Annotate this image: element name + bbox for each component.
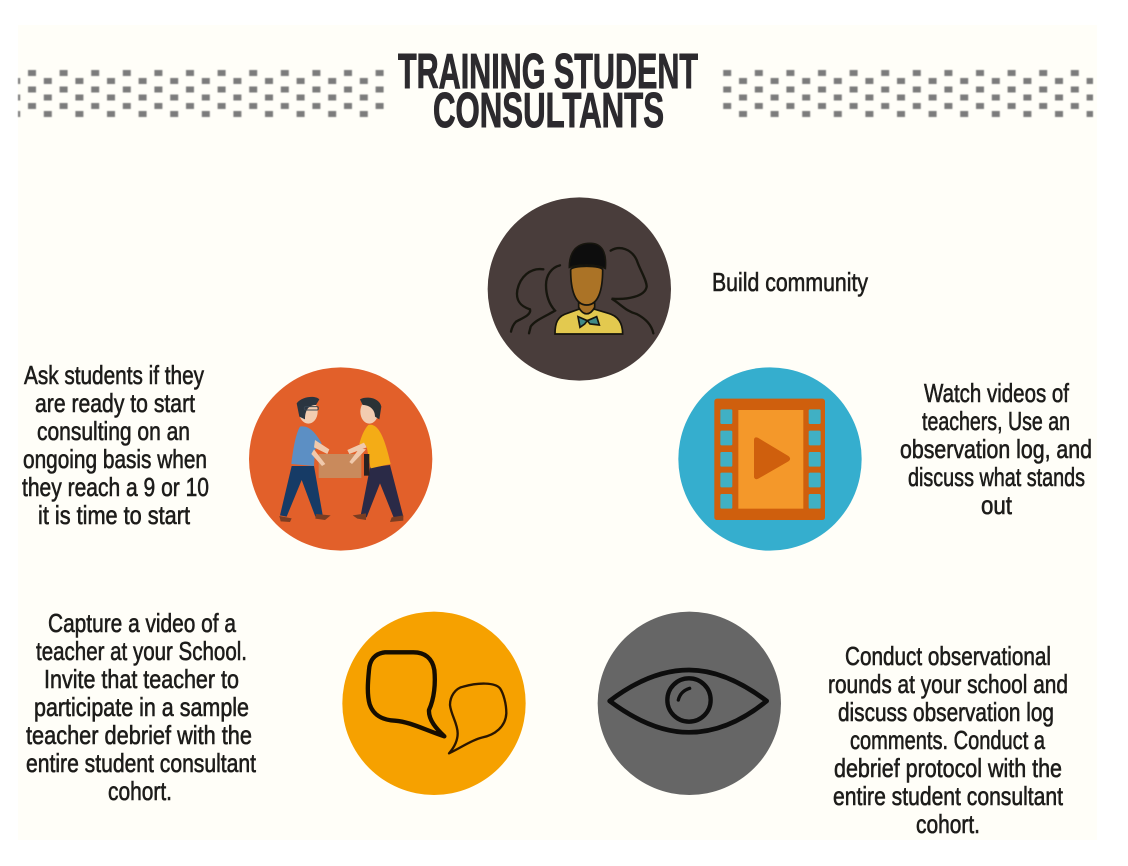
label: ask students <box>22 360 209 530</box>
label: ask students: it is time to start <box>38 500 191 530</box>
label: watch videos: observation log, and <box>900 434 1092 464</box>
label: capture a video: cohort. <box>108 776 172 806</box>
decorative dot band left <box>18 69 384 117</box>
label: capture a video: participate in a sample <box>34 692 249 722</box>
box <box>319 454 361 478</box>
label: watch videos <box>900 378 1092 520</box>
step 4: speech bubbles icon <box>342 612 526 795</box>
label: capture a video: teacher at your School. <box>36 636 247 666</box>
label: watch videos: teachers, Use an <box>922 406 1070 436</box>
label: watch videos: Watch videos of <box>924 378 1070 408</box>
icon: background people outlines <box>511 248 653 333</box>
label: observational rounds: cohort. <box>916 809 980 839</box>
step 1: build community icon <box>488 197 671 381</box>
label: build community: Build community <box>712 267 868 297</box>
label: observational rounds <box>828 641 1068 839</box>
label: ask students: ongoing basis when <box>23 444 207 474</box>
label: capture a video: Invite that teacher to <box>44 664 239 694</box>
label: observational rounds: debrief protocol with the <box>834 753 1062 783</box>
label: watch videos: out <box>981 490 1013 520</box>
label: capture a video: entire student consultant <box>26 748 257 778</box>
decorative dot band right <box>723 69 1093 117</box>
left person <box>280 466 323 517</box>
title: CONSULTANTS <box>433 84 664 138</box>
label: capture a video <box>26 608 257 806</box>
label: ask students: they reach a 9 or 10 <box>22 472 209 502</box>
label: ask students: consulting on an <box>37 416 190 446</box>
label: observational rounds: Conduct observational <box>845 641 1051 671</box>
label: capture a video: teacher debrief with the <box>26 720 252 750</box>
title <box>398 45 698 138</box>
label: observational rounds: entire student consultant <box>833 781 1064 811</box>
label: ask students: Ask students if they <box>24 360 204 390</box>
right person <box>361 465 403 518</box>
label: capture a video: Capture a video of a <box>48 608 236 638</box>
step 2: video icon <box>678 367 862 551</box>
icon: front person <box>555 243 623 334</box>
step 5: handshake over box icon <box>249 367 432 551</box>
label: observational rounds: discuss observation log <box>838 697 1054 727</box>
title: TRAINING STUDENT <box>398 45 698 99</box>
label: ask students: are ready to start <box>35 388 196 418</box>
label: observational rounds: comments. Conduct a <box>850 725 1045 755</box>
label: observational rounds: rounds at your school and <box>828 669 1068 699</box>
step 3: observation eye icon <box>598 612 781 795</box>
